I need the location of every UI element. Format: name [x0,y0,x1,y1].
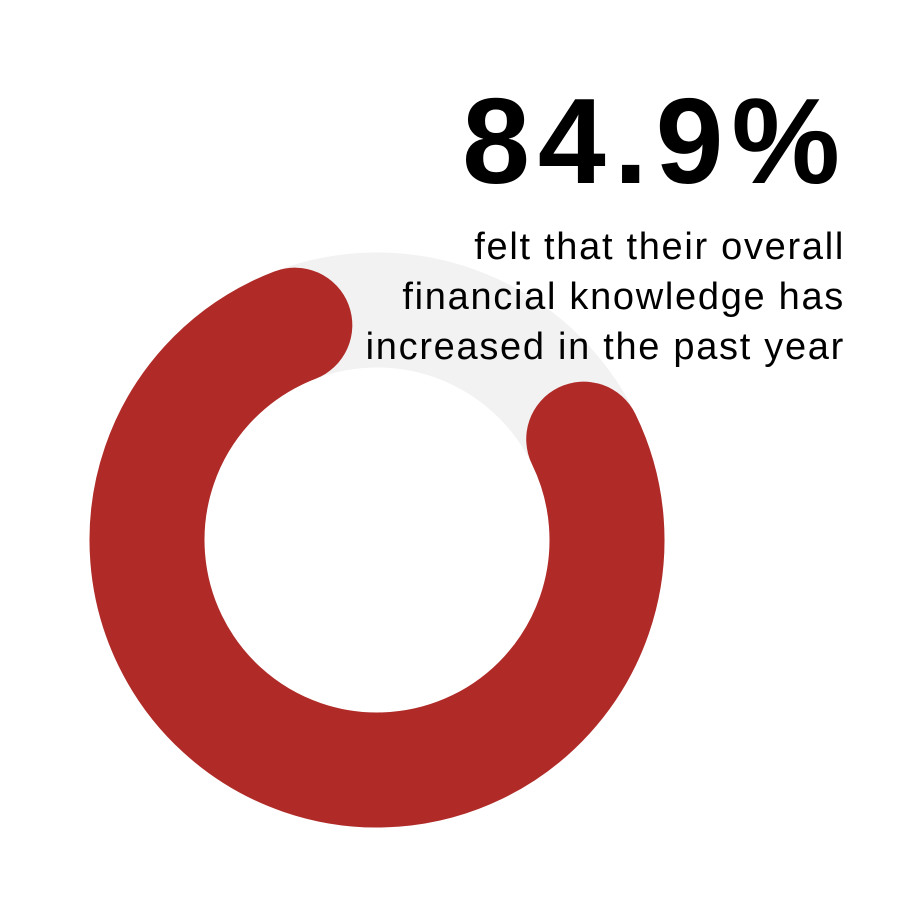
description text: felt that their overall [474,226,845,268]
description text [366,226,845,368]
description text: financial knowledge has [402,276,845,318]
headline number: 84.9% [462,73,848,209]
value arc [69,232,685,848]
track [147,310,607,770]
description text: increased in the past year [366,326,845,368]
